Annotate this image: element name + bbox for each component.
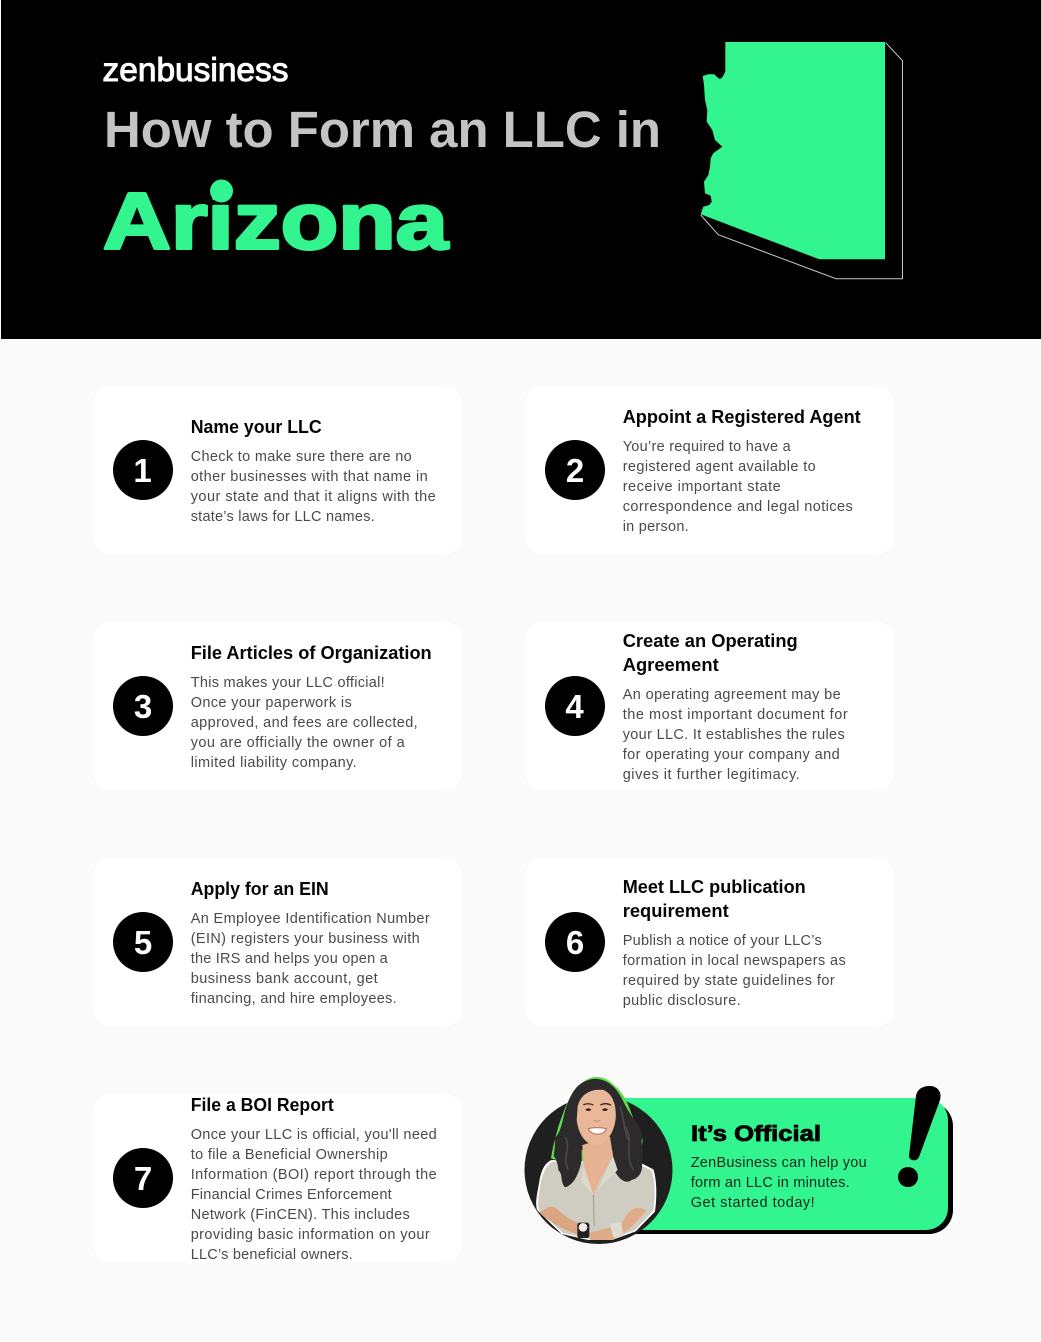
- step number 4: [545, 676, 605, 736]
- description: step 7: Network (FinCEN). This includes: [191, 1207, 410, 1223]
- heading: Meet LLC publication requirement: Meet LLC publication: [623, 876, 806, 897]
- description: step 3: approved, and fees are collected,: [191, 715, 418, 731]
- callout text: form an LLC in minutes.: [691, 1175, 850, 1191]
- description: step 7: Information (BOI) report through the: [191, 1167, 437, 1183]
- step number 1: [113, 440, 173, 500]
- description: step 5: (EIN) registers your business with: [191, 931, 420, 947]
- callout heading: It’s Official: [691, 1121, 821, 1146]
- panel: step 7: [93, 1093, 462, 1263]
- step number 6: 6: [566, 924, 584, 961]
- icon: Arizona state map: [701, 42, 902, 279]
- panel: step 5: [93, 857, 462, 1027]
- heading: Create an Operating Agreement: Agreement: [623, 654, 719, 675]
- description: step 3: [191, 675, 418, 771]
- step number 7: [113, 1148, 173, 1208]
- description: step 7: to file a Beneficial Ownership: [191, 1147, 388, 1163]
- heading: File Articles of Organization: File Articles of Organization: [191, 642, 432, 663]
- description: step 7: Once your LLC is official, you'll need: [191, 1127, 437, 1143]
- step number 1: 1: [133, 452, 152, 489]
- heading: File a BOI Report: File a BOI Report: [191, 1094, 334, 1115]
- step number 4: 4: [565, 688, 584, 725]
- heading: Meet LLC publication requirement: [623, 876, 806, 921]
- description: step 2: correspondence and legal notices: [623, 499, 853, 515]
- description: step 1: your state and that it aligns with the: [191, 489, 436, 505]
- callout text: ZenBusiness can help you: [691, 1155, 867, 1171]
- description: step 4: for operating your company and: [623, 747, 840, 763]
- title: How to Form an LLC in: How to Form an LLC in: [104, 101, 661, 158]
- title: Arizona: Arizona: [103, 176, 449, 266]
- heading: Create an Operating Agreement: Create an Operating: [623, 630, 798, 651]
- description: step 4: gives it further legitimacy.: [623, 767, 800, 783]
- callout background: [600, 1098, 953, 1234]
- description: step 1: state’s laws for LLC names.: [191, 509, 375, 525]
- heading: Meet LLC publication requirement: requirement: [623, 900, 729, 921]
- description: step 3: you are officially the owner of a: [191, 735, 406, 751]
- panel: step 4: [525, 621, 894, 791]
- panel: step 1: [93, 385, 462, 555]
- description: step 6: [623, 933, 846, 1009]
- callout text: Get started today!: [691, 1195, 815, 1211]
- description: step 3: Once your paperwork is: [191, 695, 352, 711]
- description: step 6: formation in local newspapers as: [623, 953, 846, 969]
- description: step 5: An Employee Identification Number: [191, 911, 430, 927]
- step number 3: 3: [134, 688, 152, 725]
- panel: step 2: [525, 385, 894, 555]
- heading: Create an Operating Agreement: [623, 630, 798, 675]
- description: step 5: business bank account, get: [191, 971, 378, 987]
- description: step 6: public disclosure.: [623, 993, 741, 1009]
- description: step 4: [623, 687, 848, 783]
- heading: Apply for an EIN: Apply for an EIN: [191, 878, 329, 899]
- step number 5: [113, 912, 173, 972]
- description: step 6: required by state guidelines for: [623, 973, 835, 989]
- description: step 1: Check to make sure there are no: [191, 449, 412, 465]
- description: step 2: You’re required to have a: [623, 439, 792, 455]
- description: step 3: limited liability company.: [191, 755, 357, 771]
- step number 6: [545, 912, 605, 972]
- panel: step 3: [93, 621, 462, 791]
- callout: It's Official: [524, 1077, 953, 1244]
- icon: exclamation mark: [898, 1086, 941, 1187]
- description: step 4: the most important document for: [623, 707, 848, 723]
- step number 2: 2: [566, 452, 584, 489]
- callout text: [691, 1155, 867, 1211]
- description: step 5: the IRS and helps you open a: [191, 951, 389, 967]
- description: step 2: receive important state: [623, 479, 781, 495]
- header banner: [1, 0, 1041, 339]
- step number 3: [113, 676, 173, 736]
- description: step 7: Financial Crimes Enforcement: [191, 1187, 392, 1203]
- description: step 5: financing, and hire employees.: [191, 991, 397, 1007]
- description: step 4: An operating agreement may be: [623, 687, 841, 703]
- description: step 1: other businesses with that name in: [191, 469, 428, 485]
- description: step 4: your LLC. It establishes the rules: [623, 727, 845, 743]
- panel: step 6: [525, 857, 894, 1027]
- step number 5: 5: [134, 924, 152, 961]
- heading: Name your LLC: Name your LLC: [191, 416, 322, 437]
- description: step 2: [623, 439, 853, 535]
- description: step 7: providing basic information on your: [191, 1227, 430, 1243]
- step number 2: [545, 440, 605, 500]
- description: step 7: [191, 1127, 437, 1263]
- description: step 2: registered agent available to: [623, 459, 816, 475]
- heading: Appoint a Registered Agent: Appoint a Registered Agent: [623, 406, 861, 427]
- description: step 6: Publish a notice of your LLC’s: [623, 933, 822, 949]
- portrait: smiling woman: [524, 1077, 672, 1244]
- logo: zenbusiness: zenbusiness: [102, 51, 288, 88]
- step number 7: 7: [134, 1160, 152, 1197]
- description: step 1: [191, 449, 436, 525]
- description: step 7: LLC’s beneficial owners.: [191, 1247, 353, 1263]
- description: step 5: [191, 911, 430, 1007]
- description: step 3: This makes your LLC official!: [191, 675, 385, 691]
- description: step 2: in person.: [623, 519, 689, 535]
